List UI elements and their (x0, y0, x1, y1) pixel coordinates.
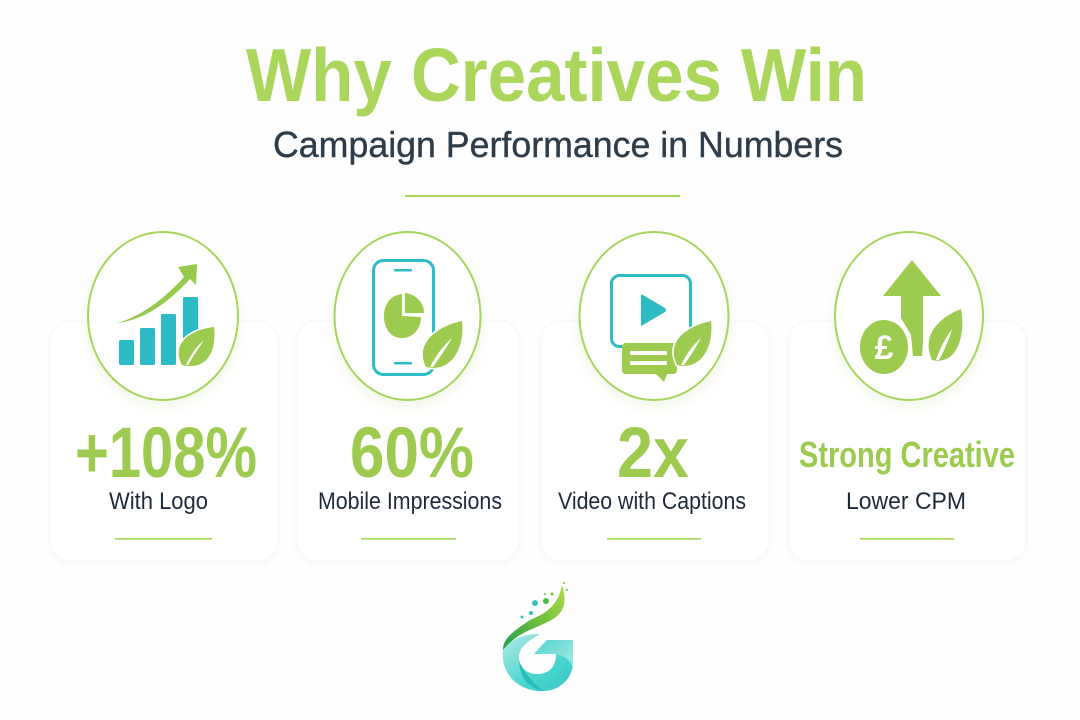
accent line (115, 538, 212, 540)
stat value: +108% (75, 414, 257, 493)
logo (503, 582, 573, 691)
stat value: 2x (617, 414, 689, 493)
icon circle (835, 232, 983, 400)
panel: lower CPM (789, 232, 1026, 561)
stat value: 60% (350, 414, 474, 493)
panel: video with captions (541, 232, 769, 561)
title divider (405, 195, 680, 197)
icon circle (580, 232, 728, 400)
accent line (860, 538, 954, 540)
stat label: Mobile Impressions (318, 488, 502, 515)
stat label: Lower CPM (846, 488, 966, 515)
icon: up arrow, pound coin and leaf (860, 260, 962, 374)
subtitle: Campaign Performance in Numbers (273, 124, 843, 165)
icon circle (88, 232, 238, 400)
icon circle (334, 232, 480, 400)
card background (541, 321, 769, 561)
card background (297, 321, 519, 561)
icon: rising bar chart with leaf (117, 264, 214, 366)
icon: video player with captions and leaf (612, 276, 711, 382)
panel: with logo (50, 232, 278, 561)
icon: phone with pie chart and leaf (374, 260, 462, 374)
icon: up arrow, pound coin and leaf: £ (875, 329, 894, 367)
stat value: Strong Creative (799, 434, 1015, 475)
card background (50, 321, 278, 561)
stat label: With Logo (109, 488, 208, 515)
accent line (361, 538, 456, 540)
panel: mobile impressions (297, 232, 519, 561)
title: Why Creatives Win (246, 33, 867, 117)
card background (789, 321, 1026, 561)
stat label: Video with Captions (558, 488, 746, 515)
accent line (607, 538, 701, 540)
